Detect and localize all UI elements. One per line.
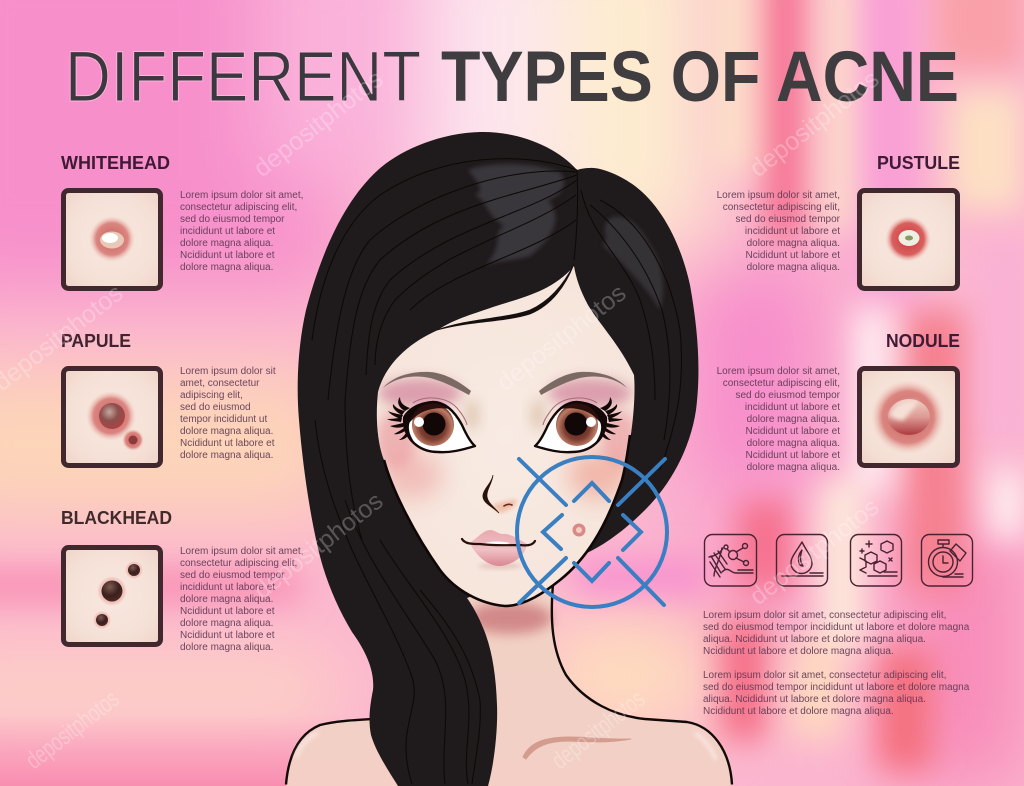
description: dolore magna aliqua. bbox=[747, 238, 840, 249]
description: dolore magna aliqua. bbox=[747, 262, 840, 273]
description: sed do eiusmod tempor bbox=[735, 214, 841, 225]
description: dolore magna aliqua. bbox=[747, 414, 840, 425]
neck and shoulders bbox=[286, 580, 732, 786]
description: tempor incididunt ut bbox=[180, 414, 267, 425]
description: dolore magna aliqua. bbox=[180, 642, 273, 653]
description: incididunt ut labore et bbox=[180, 582, 275, 593]
description: dolore magna aliqua. bbox=[747, 438, 840, 449]
text block: lower paragraphs: Lorem ipsum dolor sit amet, consectetur adipiscing elit, bbox=[703, 610, 946, 621]
description: Lorem ipsum dolor sit bbox=[180, 366, 276, 377]
description: dolore magna aliqua. bbox=[180, 594, 273, 605]
watermarks: depositphotos bbox=[744, 493, 884, 611]
icon: water drop bbox=[776, 534, 828, 586]
watermarks: depositphotos bbox=[546, 685, 650, 775]
skin tile bbox=[860, 368, 958, 466]
heading: WHITEHEAD bbox=[61, 153, 170, 173]
watermarks: depositphotos bbox=[248, 487, 388, 605]
text block: lower paragraphs: Lorem ipsum dolor sit amet, consectetur adipiscing elit, bbox=[703, 670, 946, 681]
text block: lower paragraphs bbox=[703, 610, 970, 717]
icon: DNA and molecule bbox=[704, 534, 756, 586]
description: amet, consectetur bbox=[180, 378, 260, 389]
heading: PUSTULE bbox=[877, 153, 960, 173]
description: Lorem ipsum dolor sit amet, bbox=[717, 366, 840, 377]
description: consectetur adipiscing elit, bbox=[723, 202, 840, 213]
description: sed do eiusmod bbox=[180, 402, 251, 413]
description: sed do eiusmod tempor bbox=[735, 390, 841, 401]
text block: lower paragraphs: aliqua. Ncididunt ut labore et dolore magna aliqua. bbox=[703, 694, 926, 705]
pimple on cheek bbox=[572, 524, 586, 536]
watermarks: depositphotos bbox=[248, 65, 388, 183]
description: Ncididunt ut labore et bbox=[180, 630, 275, 641]
right eyebrow bbox=[539, 372, 627, 395]
panel: whitehead bbox=[61, 153, 303, 288]
hair bbox=[298, 132, 698, 786]
description: Ncididunt ut labore et bbox=[180, 250, 275, 261]
heading: BLACKHEAD bbox=[61, 508, 172, 528]
watermarks: depositphotos bbox=[20, 685, 124, 775]
blush and eye shadow bbox=[376, 378, 638, 499]
description: Ncididunt ut labore et bbox=[745, 450, 840, 461]
description: consectetur adipiscing elit, bbox=[723, 378, 840, 389]
icon: hexagons and sparkles bbox=[850, 534, 902, 586]
description: dolore magna aliqua. bbox=[180, 426, 273, 437]
description: dolore magna aliqua. bbox=[180, 262, 273, 273]
description: sed do eiusmod tempor bbox=[180, 570, 285, 581]
text block: lower paragraphs: sed do eiusmod tempor incididunt ut labore et dolore magna bbox=[703, 622, 970, 633]
panel: pustule bbox=[717, 153, 960, 288]
description: Ncididunt ut labore et bbox=[745, 426, 840, 437]
icon: stopwatch bbox=[922, 534, 972, 586]
text block: lower paragraphs: aliqua. Ncididunt ut labore et dolore magna aliqua. bbox=[703, 634, 926, 645]
text block: lower paragraphs: sed do eiusmod tempor incididunt ut labore et dolore magna bbox=[703, 682, 970, 693]
lips bbox=[462, 530, 535, 569]
description: sed do eiusmod tempor bbox=[180, 214, 285, 225]
description: Lorem ipsum dolor sit amet, bbox=[180, 190, 303, 201]
description: Ncididunt ut labore et bbox=[745, 250, 840, 261]
title: DIFFERENT bbox=[65, 38, 421, 117]
face bbox=[376, 264, 638, 606]
skin tile bbox=[64, 190, 160, 288]
description: Ncididunt ut labore et bbox=[180, 438, 275, 449]
description: incididunt ut labore et bbox=[745, 226, 840, 237]
nose bbox=[483, 475, 517, 513]
description: dolore magna aliqua. bbox=[180, 238, 273, 249]
text block: lower paragraphs: Ncididunt ut labore et dolore magna aliqua. bbox=[703, 646, 894, 657]
description: consectetur adipiscing elit, bbox=[180, 202, 297, 213]
illustration: woman with acne bbox=[286, 132, 732, 786]
skin tile bbox=[64, 548, 160, 644]
watermarks: depositphotos bbox=[744, 65, 884, 183]
title bbox=[65, 38, 959, 117]
description: consectetur adipiscing elit, bbox=[180, 558, 297, 569]
heading: PAPULE bbox=[61, 331, 131, 351]
blue target bbox=[517, 457, 667, 607]
description: dolore magna aliqua. bbox=[747, 462, 840, 473]
watermarks: depositphotos bbox=[491, 279, 631, 397]
description: dolore magna aliqua. bbox=[180, 450, 273, 461]
panel: blackhead bbox=[61, 508, 303, 653]
heading: NODULE bbox=[886, 331, 960, 351]
panel: nodule bbox=[717, 331, 960, 473]
skin tile bbox=[860, 190, 958, 288]
description: Lorem ipsum dolor sit amet, bbox=[180, 546, 303, 557]
description: incididunt ut labore et bbox=[180, 226, 275, 237]
left eyebrow bbox=[383, 372, 471, 395]
title: TYPES OF ACNE bbox=[441, 38, 959, 117]
description: adipiscing elit, bbox=[180, 390, 243, 401]
description: dolore magna aliqua. bbox=[180, 618, 273, 629]
watermarks bbox=[0, 65, 884, 775]
skin tile bbox=[64, 368, 160, 466]
text block: lower paragraphs: Ncididunt ut labore et dolore magna aliqua. bbox=[703, 706, 894, 717]
description: Ncididunt ut labore et bbox=[180, 606, 275, 617]
description: Lorem ipsum dolor sit amet, bbox=[717, 190, 840, 201]
left eye bbox=[387, 397, 475, 452]
right eye bbox=[535, 397, 623, 452]
panel: papule bbox=[61, 331, 276, 466]
description: incididunt ut labore et bbox=[745, 402, 840, 413]
